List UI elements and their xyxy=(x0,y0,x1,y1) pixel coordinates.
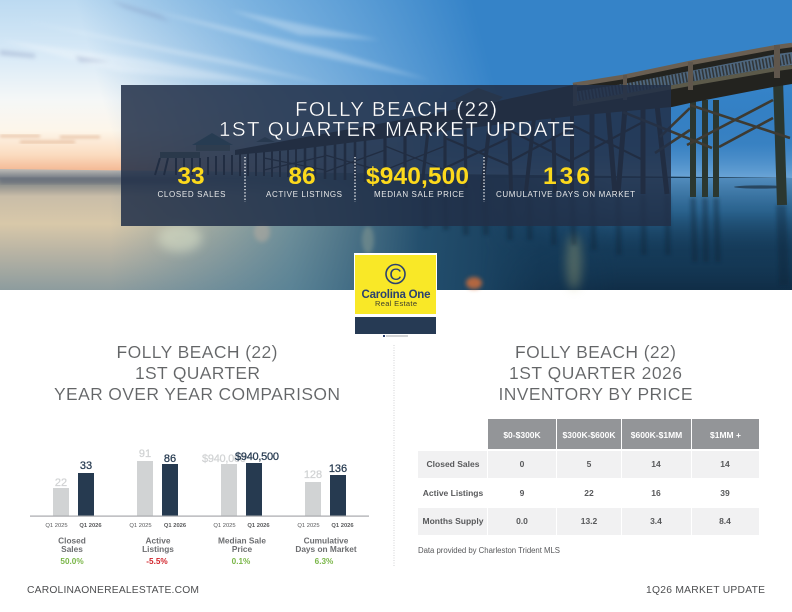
bars: closed sales: 22 xyxy=(55,477,67,489)
table row: months supply xyxy=(418,508,759,535)
table header: $0-$300K xyxy=(503,430,542,440)
heading: inventory by price xyxy=(498,342,692,404)
bars: active listings xyxy=(137,448,178,516)
metric labels and change: Price xyxy=(232,544,253,554)
bars: median sale price xyxy=(202,451,279,516)
title: FOLLY BEACH (22) xyxy=(295,98,497,121)
heading: inventory by price: FOLLY BEACH (22) xyxy=(515,342,676,362)
table row: months supply: 3.4 xyxy=(650,516,662,526)
bar chart: year over year comparison: -5.5% xyxy=(146,557,168,566)
logo: Carolina One Real Estate: Carolina One xyxy=(362,289,430,301)
table header: $1MM + xyxy=(710,430,741,440)
metric labels and change: Active xyxy=(146,536,171,546)
deck underside xyxy=(235,45,792,155)
title xyxy=(219,98,575,141)
axis labels: Q1 2026 xyxy=(164,523,187,529)
axis labels: Q1 2025 xyxy=(45,523,68,529)
metric labels and change: Cumulative xyxy=(304,536,349,546)
logo: Carolina One Real Estate: C xyxy=(389,265,402,284)
table row: closed sales xyxy=(418,451,759,478)
panel: header overlay xyxy=(121,85,671,226)
stat: active listings xyxy=(266,163,342,199)
bar chart: year over year comparison: 6.3% xyxy=(315,557,334,566)
axis labels: Q1 2025 xyxy=(129,523,152,529)
metric labels and change: Listings xyxy=(142,544,174,554)
metric labels and change: Sales xyxy=(61,544,83,554)
table row: active listings: Active Listings xyxy=(423,488,483,498)
stat: cumulative days on market: 136 xyxy=(543,163,590,190)
stat: active listings: 86 xyxy=(288,163,316,190)
bar chart: year over year comparison xyxy=(30,448,369,566)
bars: closed sales: 33 xyxy=(80,460,92,472)
table row: active listings: 22 xyxy=(584,488,594,498)
table header: $300K-$600K xyxy=(563,430,616,440)
table row: active listings: 16 xyxy=(651,488,661,498)
bars: median sale price: $940,000 xyxy=(202,453,246,465)
heading: year over year comparison: FOLLY BEACH (22) xyxy=(116,342,278,362)
table row: closed sales: 14 xyxy=(651,459,661,469)
bars: cumulative days on market: 136 xyxy=(329,463,347,475)
axis labels: Q1 2026 xyxy=(331,523,354,529)
stat: cumulative days on market: CUMULATIVE DAYS ON MARKET xyxy=(496,190,635,199)
table row: closed sales: 14 xyxy=(720,459,730,469)
bar chart: year over year comparison: 0.1% xyxy=(232,557,251,566)
table row: months supply: Months Supply xyxy=(423,516,484,526)
table row: closed sales: Closed Sales xyxy=(427,459,480,469)
heading: year over year comparison xyxy=(54,342,340,404)
table header: $600K-$1MM xyxy=(631,430,682,440)
logo: Carolina One Real Estate: Real Estate xyxy=(375,299,417,308)
pier silhouette xyxy=(155,45,792,205)
bars: median sale price: $940,500 xyxy=(235,451,279,463)
table row: active listings: 39 xyxy=(720,488,730,498)
heading: year over year comparison: YEAR OVER YEAR COMPARISON xyxy=(54,384,340,404)
title: 1ST QUARTER MARKET UPDATE xyxy=(219,118,575,141)
stat: closed sales xyxy=(158,163,226,199)
stat: active listings: ACTIVE LISTINGS xyxy=(266,190,342,199)
table row: closed sales: 5 xyxy=(587,459,592,469)
bars: active listings: 91 xyxy=(139,448,151,460)
table: inventory by price xyxy=(418,419,759,535)
stat: median sale price: $940,500 xyxy=(366,163,469,190)
data source note: Data provided by Charleston Trident MLS xyxy=(418,546,560,555)
bars: cumulative days on market xyxy=(304,463,347,516)
metric labels and change: Closed xyxy=(58,536,86,546)
table row: active listings: 9 xyxy=(520,488,525,498)
bar chart: year over year comparison: 50.0% xyxy=(60,557,84,566)
heading: year over year comparison: 1ST QUARTER xyxy=(135,363,260,383)
stat: closed sales: CLOSED SALES xyxy=(158,190,226,199)
bars: cumulative days on market: 128 xyxy=(304,469,322,481)
table row: months supply: 8.4 xyxy=(719,516,731,526)
axis labels: Q1 2025 xyxy=(213,523,236,529)
bars: closed sales xyxy=(53,460,94,516)
heading: inventory by price: INVENTORY BY PRICE xyxy=(498,384,692,404)
pier pavilion: large xyxy=(449,88,503,110)
table row: active listings xyxy=(423,488,730,498)
footer: website: CAROLINAONEREALESTATE.COM xyxy=(27,585,199,596)
stat: median sale price: MEDIAN SALE PRICE xyxy=(374,190,464,199)
bars: active listings: 86 xyxy=(164,453,176,465)
pier pavilion: far xyxy=(160,133,275,158)
axis labels: Q1 2026 xyxy=(247,523,270,529)
deck railing xyxy=(573,45,792,106)
metric labels and change xyxy=(58,536,357,554)
table row: months supply: 0.0 xyxy=(516,516,528,526)
axis labels: Q1 2026 xyxy=(79,523,102,529)
metric labels and change: Days on Market xyxy=(295,544,357,554)
axis labels xyxy=(45,523,354,529)
logo: Carolina One Real Estate xyxy=(354,253,437,337)
footer: report name: 1Q26 MARKET UPDATE xyxy=(646,585,765,596)
axis labels: Q1 2025 xyxy=(297,523,320,529)
table row: months supply: 13.2 xyxy=(581,516,598,526)
hero photo: beach pier at dusk xyxy=(0,0,792,290)
heading: inventory by price: 1ST QUARTER 2026 xyxy=(509,363,682,383)
stat: cumulative days on market xyxy=(496,163,635,199)
metric labels and change: Median Sale xyxy=(218,536,266,546)
table row: closed sales: 0 xyxy=(520,459,525,469)
stat: closed sales: 33 xyxy=(177,163,205,190)
table header xyxy=(488,419,759,449)
